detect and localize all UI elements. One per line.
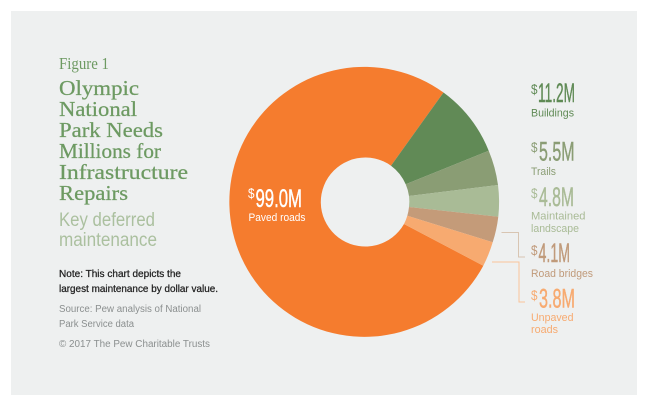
donut chart [229,67,499,337]
label: trails: 5.5M [539,136,574,166]
title [59,76,188,205]
title: Park Needs [59,118,163,142]
title: Infrastructure [59,160,188,184]
label: unpaved roads [531,284,575,336]
label: road bridges: 4.1M [538,238,570,268]
slice: buildings [391,92,489,184]
source: Park Service data [59,319,134,330]
label: paved roads: 99.0M [256,185,302,213]
label: road bridges: Road bridges [531,268,593,280]
label: trails [531,136,574,178]
source [59,304,201,330]
label: trails: $ [531,139,538,155]
leader line: unpaved roads [492,262,525,302]
slice: road bridges [407,207,498,242]
leader line: road bridges [502,232,525,257]
slice: paved roads [229,67,483,337]
note [59,269,218,295]
label: buildings: Buildings [531,108,574,120]
label: maintained landscape: Maintained [531,210,586,222]
heading block [59,54,188,251]
note: Note: This chart depicts the [59,269,181,280]
source: Source: Pew analysis of National [59,304,201,315]
label: paved roads: Paved roads [248,212,306,224]
label: maintained landscape: landscape [531,223,579,235]
title: Olympic [59,76,139,100]
label: trails: Trails [531,166,556,178]
label: buildings: $ [531,81,538,97]
label: maintained landscape: $ [531,185,538,201]
copyright: © 2017 The Pew Charitable Trusts [59,339,210,350]
label: road bridges [531,238,593,280]
title: Millions for [59,139,161,163]
label: buildings: 11.2M [538,78,575,108]
slice: maintained landscape [409,185,499,217]
label: road bridges: $ [531,242,538,258]
note: largest maintenance by dollar value. [59,284,218,295]
label: maintained landscape [531,182,586,235]
label: unpaved roads: roads [531,324,558,336]
label: unpaved roads: $ [531,287,538,303]
label: unpaved roads: 3.8M [539,284,575,314]
label: maintained landscape: 4.8M [539,182,574,212]
figure label: Figure 1 [59,54,109,73]
slice: unpaved roads [404,216,493,266]
title: National [59,97,137,121]
subtitle: Key deferred [59,210,155,231]
title: Repairs [59,181,128,205]
subtitle: maintenance [59,230,157,251]
label: buildings [531,78,575,120]
subtitle [59,210,157,251]
slice: trails [406,151,498,196]
label: paved roads [248,185,306,224]
label: unpaved roads: Unpaved [531,312,574,324]
label: paved roads: $ [248,185,255,201]
